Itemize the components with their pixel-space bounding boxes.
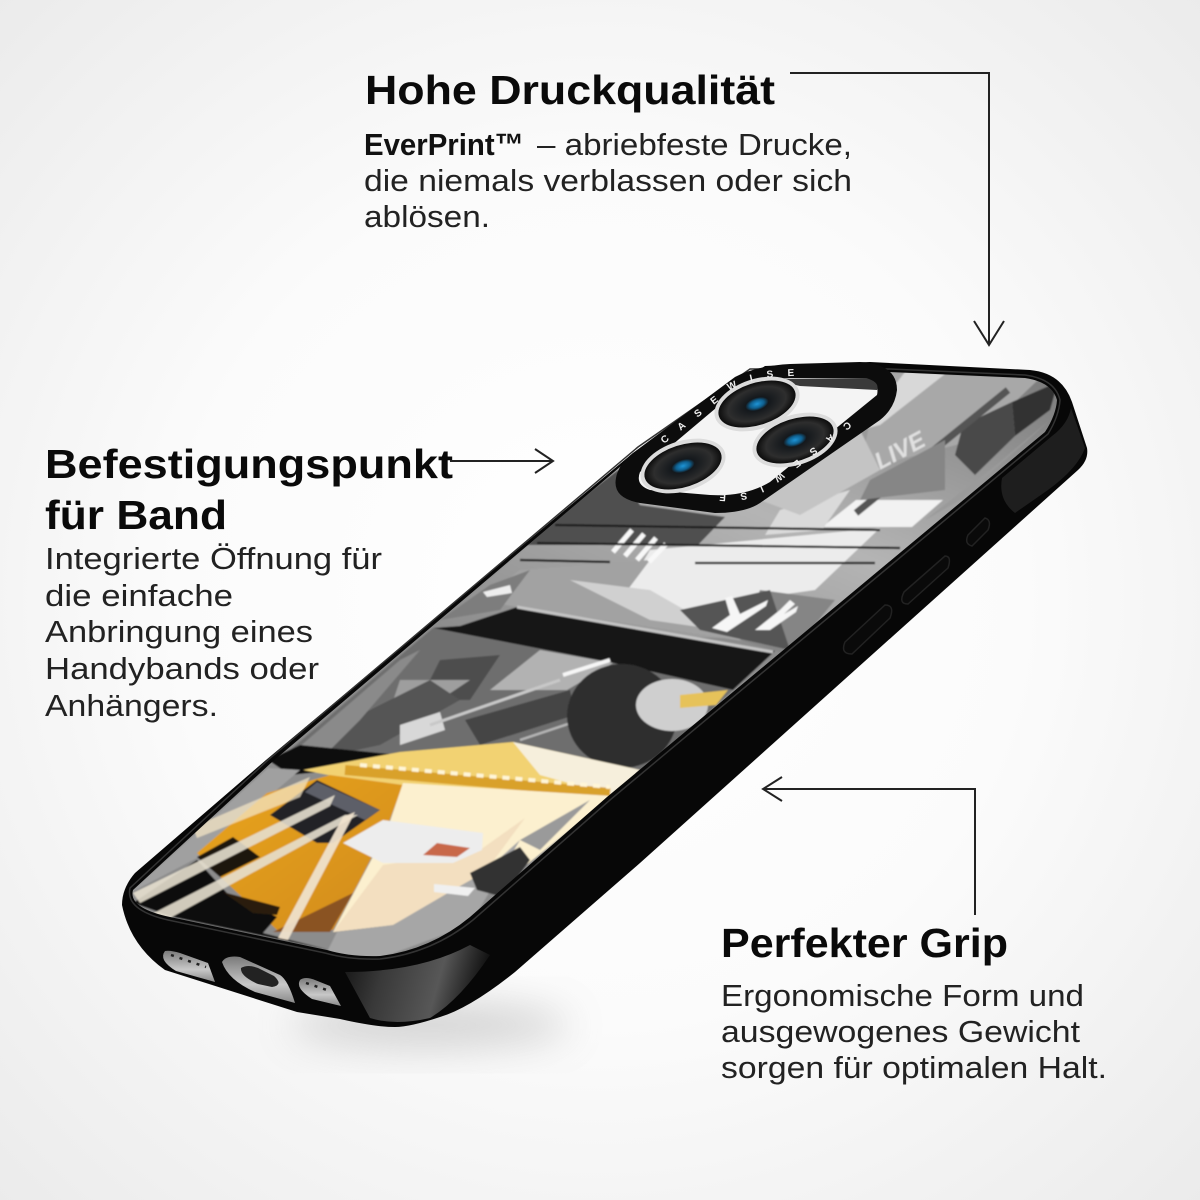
brand text top: CASEWISE xyxy=(661,369,794,442)
heading: Perfekter Grip: Perfekter Grip xyxy=(721,920,1008,966)
grey circle xyxy=(636,679,708,731)
dark roof under camera xyxy=(520,470,725,545)
text block: grip description: ausgewogenes Gewicht xyxy=(721,1014,1080,1049)
black wedge xyxy=(133,860,330,950)
cream light overlay xyxy=(333,783,612,932)
building stripes xyxy=(613,530,666,562)
LIVE lettering: LIVE xyxy=(870,426,931,475)
glass rim xyxy=(129,369,1060,959)
heading: Befestigungspunkt für Band xyxy=(45,441,453,538)
heading: Befestigungspunkt für Band: für Band xyxy=(45,492,227,538)
text block: grip description: sorgen für optimalen Halt. xyxy=(721,1050,1107,1085)
NY marks xyxy=(712,596,798,632)
phone case body xyxy=(122,362,1087,1027)
plate top shadow xyxy=(770,378,878,390)
camera island xyxy=(616,362,897,513)
yellow roof stripe xyxy=(345,770,610,793)
left grey road xyxy=(130,768,300,893)
text block: EverPrint description: ablösen. xyxy=(364,199,490,234)
street shapes xyxy=(302,649,613,752)
lens right xyxy=(745,403,845,477)
artwork base xyxy=(132,372,1046,955)
lens top xyxy=(707,367,807,441)
text block: grip description xyxy=(721,978,1107,1085)
text block: strap attachment description: Integrierte Öffnung für xyxy=(45,541,382,576)
text block: strap attachment description xyxy=(45,541,382,723)
yellow fragment near edge xyxy=(680,690,728,708)
taxi hood xyxy=(197,775,403,930)
lens left xyxy=(633,429,733,503)
corner highlight xyxy=(345,945,490,1022)
checker pattern stripe xyxy=(360,765,610,787)
side highlight near top corner xyxy=(1001,408,1085,513)
windshield xyxy=(270,780,380,843)
cream lower region xyxy=(333,818,525,932)
overhead wires xyxy=(520,525,900,563)
dark wheel arc xyxy=(567,664,677,768)
dark band xyxy=(433,607,775,690)
brand text bottom: CASEWISE xyxy=(720,422,851,502)
text block: strap attachment description: Anbringung eines xyxy=(45,614,313,649)
lower grey street scene xyxy=(290,628,733,775)
phone illustration xyxy=(122,362,1088,1027)
printed artwork xyxy=(132,372,1057,956)
camera bezel xyxy=(616,362,897,513)
grille xyxy=(197,837,260,877)
grey road lower right xyxy=(327,840,520,960)
side buttons xyxy=(844,518,989,654)
text block: EverPrint description: die niemals verblassen oder sich xyxy=(364,163,852,198)
text block: strap attachment description: Anhängers. xyxy=(45,688,218,723)
phone shadow xyxy=(290,1003,570,1047)
dark car at right xyxy=(470,847,530,897)
diagonal light beams xyxy=(133,777,358,940)
text block: grip description: Ergonomische Form und xyxy=(721,978,1084,1013)
bright middle city xyxy=(440,528,880,655)
heading: Befestigungspunkt für Band: Befestigungspunkt xyxy=(45,441,453,487)
top right signage xyxy=(760,372,1058,535)
arrow: strap attachment xyxy=(450,449,553,473)
text block: EverPrint description: – abriebfeste Drucke, xyxy=(537,127,852,162)
lower hood shading xyxy=(273,893,353,932)
text block: EverPrint description xyxy=(364,127,852,234)
band edge line xyxy=(517,607,773,652)
text block: EverPrint description: EverPrint™ xyxy=(364,127,524,162)
arrow: grip to phone side xyxy=(763,777,975,915)
headlight xyxy=(343,820,483,863)
arrow: print quality to phone top xyxy=(790,73,1004,345)
heading: Hohe Druckqualität: Hohe Druckqualität xyxy=(365,67,775,113)
text block: strap attachment description: die einfache xyxy=(45,578,233,613)
camera plate xyxy=(639,378,878,495)
taxi roof yellow xyxy=(303,742,640,795)
black strip xyxy=(268,745,400,775)
text block: strap attachment description: Handybands oder xyxy=(45,651,319,686)
bottom ports xyxy=(163,951,341,1006)
upper city scene xyxy=(473,381,1057,638)
